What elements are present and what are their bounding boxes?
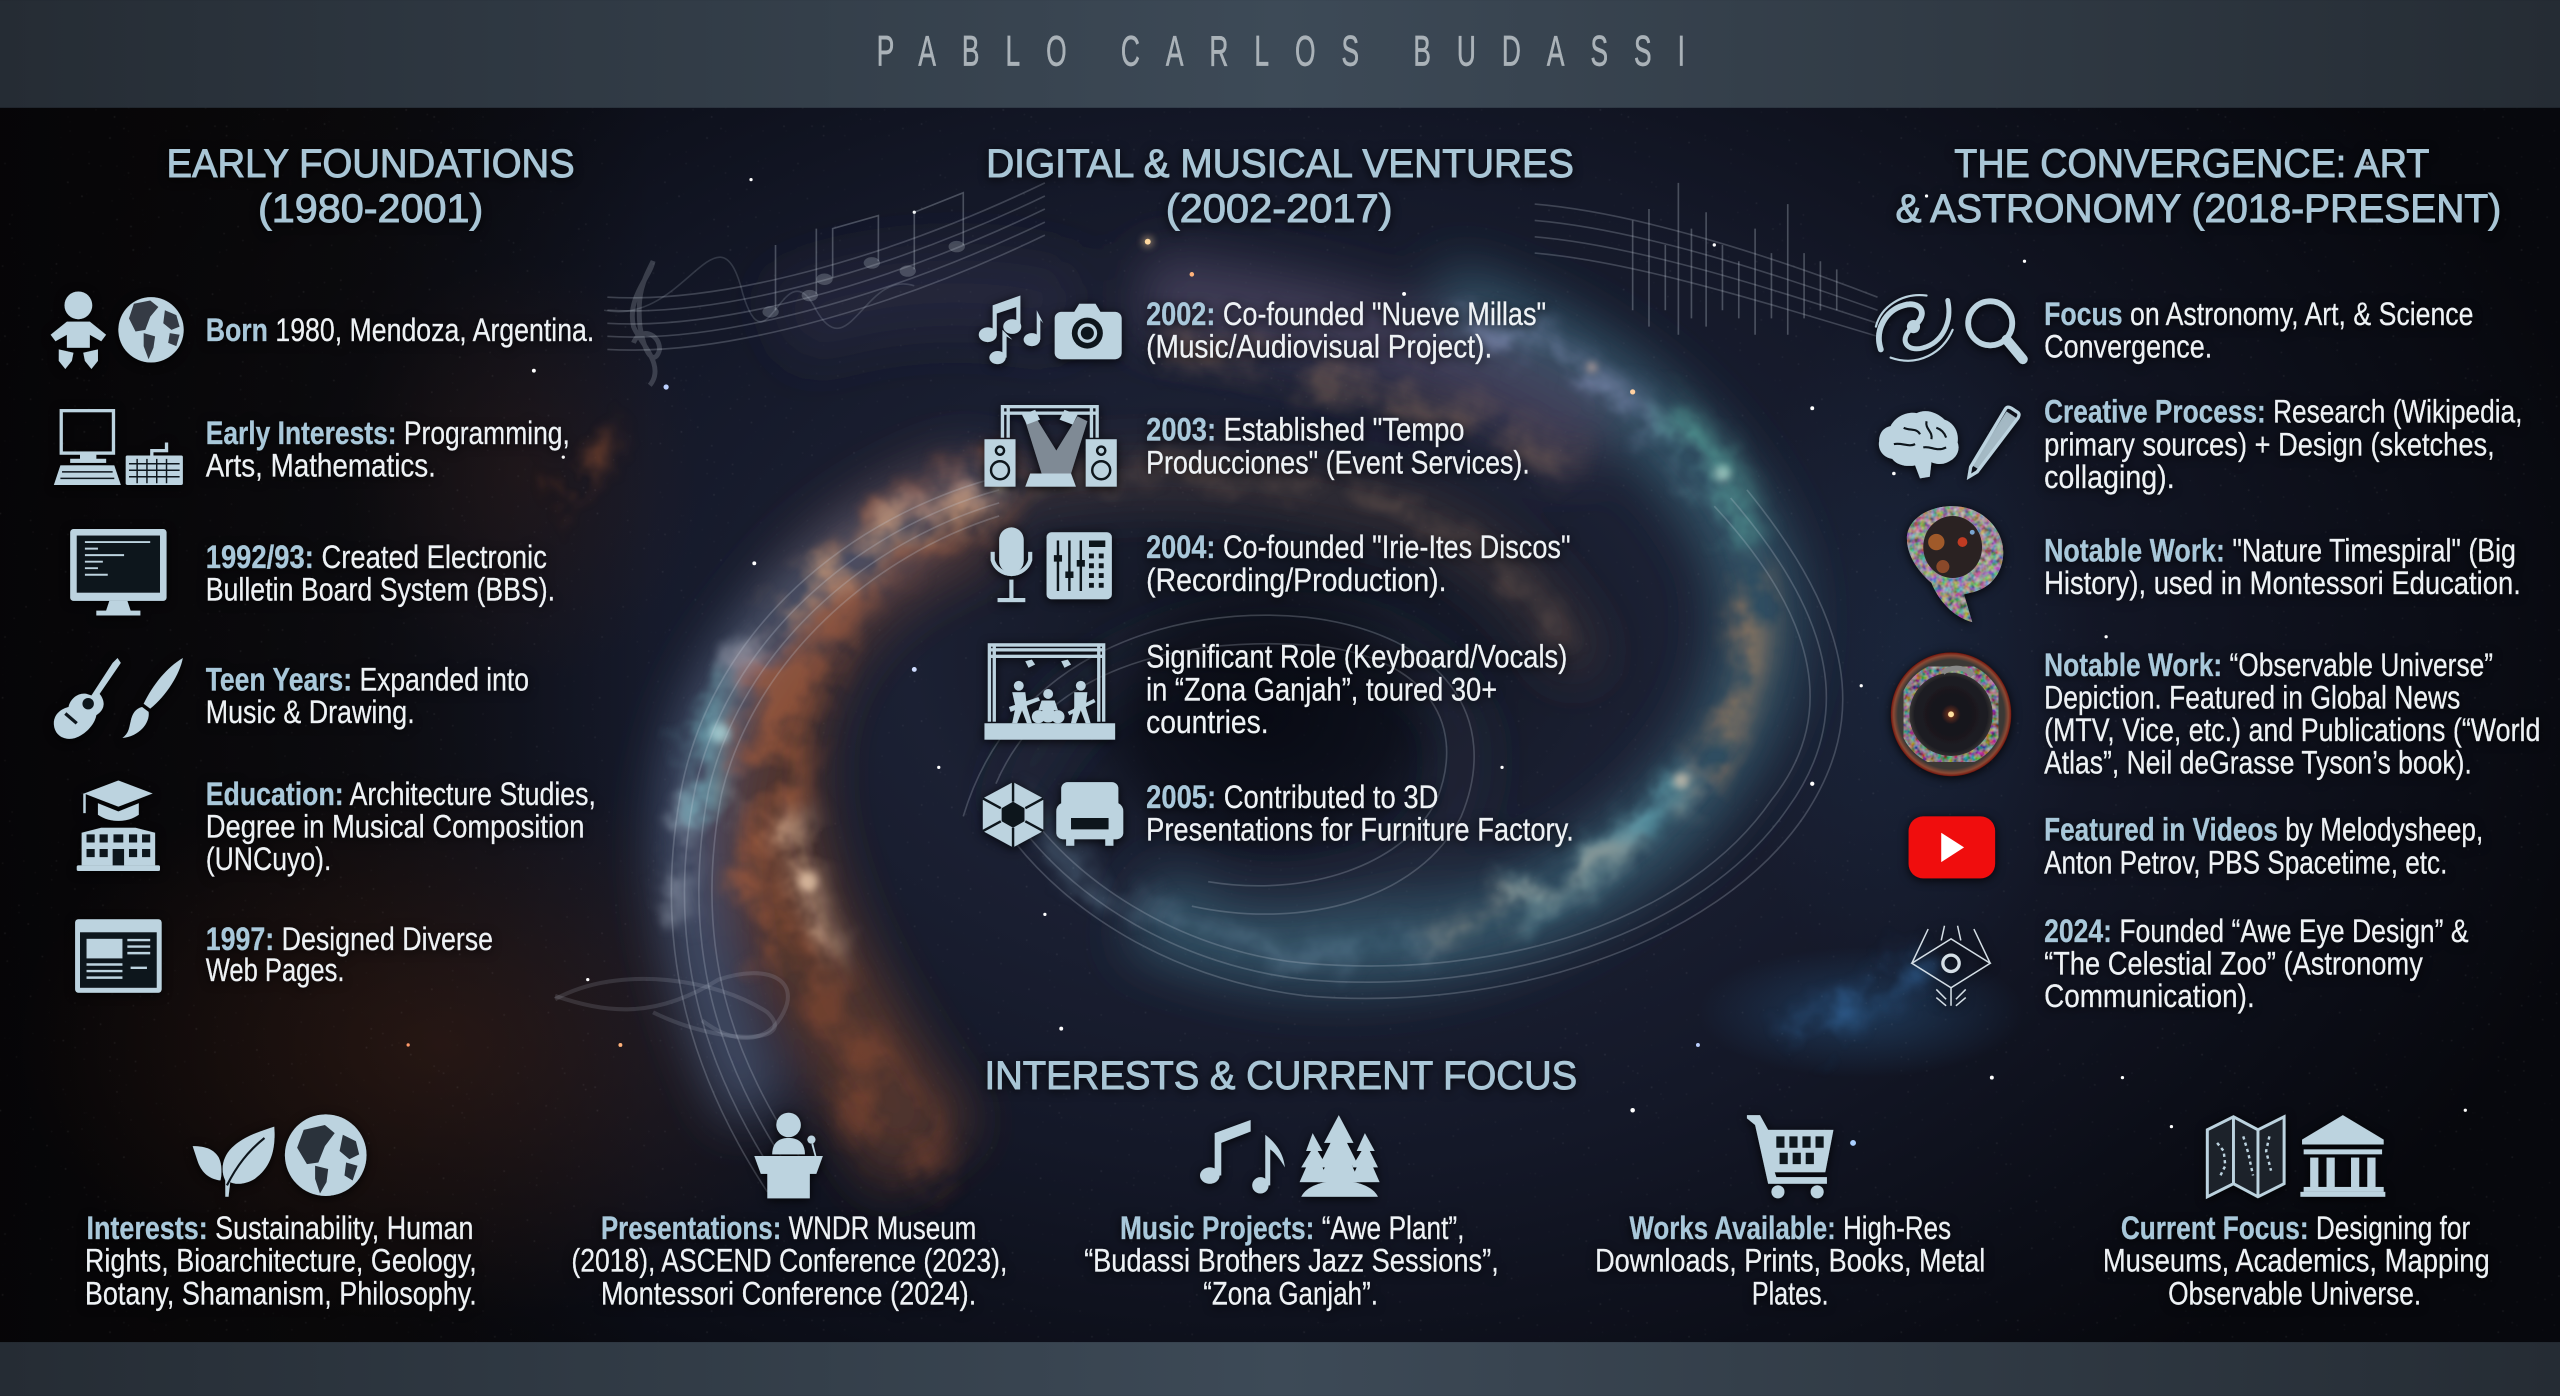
heading: digital and musical ventures	[986, 142, 1574, 231]
item: nueve millas: 2002: Co-founded "Nueve Millas"	[1146, 296, 1546, 332]
item: education	[77, 776, 596, 877]
icon: speaker at podium	[754, 1113, 823, 1198]
footer bar	[0, 1342, 2560, 1396]
item: web pages: Web Pages.	[206, 952, 344, 988]
item: videos: Anton Petrov, PBS Spacetime, etc.	[2044, 844, 2447, 880]
item: awe eye design: Communication).	[2044, 978, 2255, 1014]
icon: stage with speakers	[984, 407, 1117, 487]
column: interests	[85, 1114, 477, 1311]
column: presentations	[571, 1113, 1007, 1311]
panel: early foundations	[51, 142, 596, 993]
icon: terminal monitor	[70, 529, 167, 616]
icon: baby and globe	[51, 291, 184, 369]
column: works available: Works Available: High-Res	[1629, 1210, 1951, 1246]
item: education: Degree in Musical Composition	[206, 808, 584, 844]
heading: interests and current focus: INTERESTS & CURRENT FOCUS	[984, 1054, 1577, 1098]
column: music projects: Music Projects: “Awe Plant”,	[1120, 1210, 1464, 1246]
icon: star map and museum	[2207, 1115, 2385, 1197]
column: music projects: “Zona Ganjah”.	[1203, 1275, 1378, 1311]
heading: early foundations: EARLY FOUNDATIONS	[167, 142, 575, 186]
icon: graduation cap and building	[77, 780, 160, 871]
icon: awe eye logo	[1912, 926, 1990, 1006]
item: zona ganjah: Significant Role (Keyboard/Vocals)	[1146, 639, 1567, 675]
item: teen years	[54, 658, 529, 739]
heading: early foundations: (1980-2001)	[258, 187, 483, 231]
heading: digital and musical ventures: (2002-2017)	[1166, 187, 1393, 231]
item: observable universe	[1891, 647, 2540, 781]
item: irie-ites discos: 2004: Co-founded "Irie-Ites Discos"	[1146, 529, 1571, 565]
icon: observable universe artwork	[1891, 652, 2011, 776]
column: presentations: (2018), ASCEND Conference (2023),	[571, 1243, 1007, 1279]
column: music projects: “Budassi Brothers Jazz Sessions”,	[1084, 1243, 1499, 1279]
item: BBS: 1992/93: Created Electronic	[206, 539, 547, 575]
item: creative process: collaging).	[2044, 459, 2175, 495]
panel: the convergence	[1876, 142, 2540, 1014]
icon: leaves and globe	[193, 1114, 367, 1197]
item: awe eye design: 2024: Founded “Awe Eye Design” &	[2044, 913, 2469, 949]
item: zona ganjah: countries.	[1146, 704, 1269, 740]
column: current focus: Current Focus: Designing for	[2121, 1210, 2470, 1246]
item: BBS: Bulletin Board System (BBS).	[206, 572, 555, 608]
item: awe eye design: “The Celestial Zoo” (Astronomy	[2044, 946, 2423, 982]
icon: timespiral artwork	[1907, 506, 2003, 622]
item: irie-ites discos: (Recording/Production).	[1146, 562, 1447, 598]
item: nueve millas: (Music/Audiovisual Project).	[1146, 328, 1492, 364]
icon: guitar and brush	[54, 658, 183, 739]
heading: the convergence	[1896, 142, 2501, 231]
icon: computer and keyboards	[54, 411, 183, 485]
item: born: Born 1980, Mendoza, Argentina.	[206, 312, 594, 348]
icon: shopping cart	[1747, 1115, 1833, 1198]
icon: concert stage band	[984, 645, 1115, 740]
item: web pages: 1997: Designed Diverse	[206, 921, 493, 957]
panel: digital and musical ventures	[979, 142, 1574, 848]
item: nature timespiral: Notable Work: "Nature Timespiral" (Big	[2044, 533, 2516, 569]
icon: brain and pencil	[1879, 407, 2019, 478]
column: interests: Botany, Shamanism, Philosophy.	[85, 1275, 477, 1311]
column: works available	[1595, 1115, 1985, 1311]
item: awe eye design	[1912, 913, 2469, 1014]
item: zona ganjah: in “Zona Ganjah”, toured 30+	[1146, 671, 1497, 707]
item: 3D presentations	[983, 779, 1574, 848]
item: tempo producciones: Producciones" (Event Services).	[1146, 444, 1530, 480]
item: observable universe: Notable Work: “Observable Universe”	[2044, 647, 2493, 683]
item: focus: Convergence.	[2044, 328, 2212, 364]
title: PABLO CARLOS BUDASSI	[877, 28, 1711, 75]
item: observable universe: Depiction. Featured in Global News	[2044, 679, 2460, 715]
heading: the convergence: & ASTRONOMY (2018-PRESENT)	[1896, 187, 2501, 231]
icon: microphone and mixer	[993, 527, 1112, 600]
column: current focus: Observable Universe.	[2168, 1275, 2421, 1311]
heading: early foundations	[167, 142, 575, 231]
item: 3D presentations: Presentations for Furniture Factory.	[1146, 812, 1574, 848]
item: teen years: Teen Years: Expanded into	[206, 661, 529, 697]
icon: notes and camera	[979, 296, 1122, 364]
column: current focus: Museums, Academics, Mapping	[2103, 1243, 2490, 1279]
item: nature timespiral	[1907, 506, 2521, 622]
item: tempo producciones	[984, 407, 1530, 487]
column: presentations: Montessori Conference (2024).	[601, 1275, 976, 1311]
item: observable universe: Atlas”, Neil deGrasse Tyson’s book).	[2044, 745, 2472, 781]
item: zona ganjah	[984, 639, 1567, 740]
heading: the convergence: THE CONVERGENCE: ART	[1954, 142, 2429, 186]
column: works available: Downloads, Prints, Books, Metal	[1595, 1243, 1985, 1279]
item: teen years: Music & Drawing.	[206, 694, 415, 730]
item: education: Education: Architecture Studies,	[206, 776, 596, 812]
item: focus: Focus on Astronomy, Art, & Science	[2044, 296, 2473, 332]
item: web pages	[75, 919, 493, 993]
header bar	[0, 0, 2560, 108]
item: early interests: Early Interests: Programming,	[206, 415, 570, 451]
column: works available: Plates.	[1752, 1275, 1829, 1311]
item: irie-ites discos	[993, 527, 1571, 600]
item: 3D presentations: 2005: Contributed to 3D	[1146, 779, 1438, 815]
item: videos	[1909, 812, 2483, 880]
item: BBS	[70, 529, 555, 616]
item: creative process: primary sources) + Design (sketches,	[2044, 426, 2495, 462]
item: focus	[1876, 295, 2473, 364]
column: presentations: Presentations: WNDR Museum	[601, 1210, 976, 1246]
item: born	[51, 291, 594, 369]
column: interests: Interests: Sustainability, Human	[87, 1210, 473, 1246]
column: music projects	[1084, 1115, 1499, 1311]
item: creative process	[1879, 394, 2522, 495]
item: videos: Featured in Videos by Melodysheep,	[2044, 812, 2483, 848]
item: tempo producciones: 2003: Established "Tempo	[1146, 412, 1464, 448]
icon: notes and trees	[1200, 1115, 1380, 1197]
icon: cube and armchair	[983, 782, 1123, 847]
item: nueve millas	[979, 296, 1546, 364]
column: interests: Rights, Bioarchitecture, Geology,	[85, 1243, 477, 1279]
icon: galaxy and magnifier	[1876, 295, 2023, 361]
music staff overlay	[555, 183, 1878, 1192]
heading: digital and musical ventures: DIGITAL & MUSICAL VENTURES	[986, 142, 1574, 186]
panel: interests and current focus	[85, 1054, 2490, 1311]
item: early interests	[54, 411, 570, 485]
item: early interests: Arts, Mathematics.	[206, 448, 436, 484]
column: current focus	[2103, 1115, 2490, 1311]
item: education: (UNCuyo).	[206, 841, 331, 877]
icon: youtube	[1909, 816, 1995, 878]
icon: browser window	[75, 919, 162, 993]
